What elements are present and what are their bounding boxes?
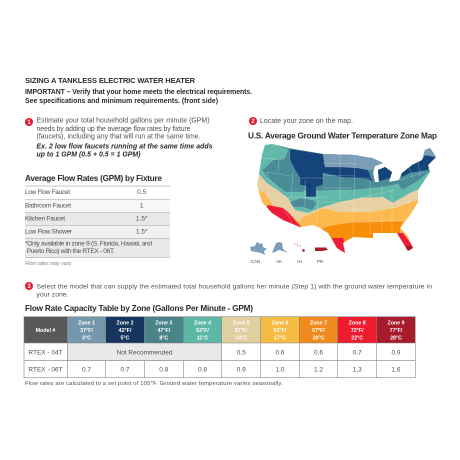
step 3 text: Select the model that can supply the estimated total household gallons her minute (Step 1) with the ground water temperature in	[36, 283, 432, 290]
table header: zone 6	[261, 317, 299, 343]
table header: zone 7	[299, 317, 338, 343]
row: RTEX-06T: 0.7	[120, 367, 130, 374]
step 1 text: Estimate your total household gallons per minute (GPM)	[36, 118, 210, 125]
table header: zone 1: 37°F/	[80, 328, 93, 334]
zone 2 michigan	[378, 167, 392, 181]
row: RTEX-04T	[28, 349, 401, 356]
zone 7 band	[322, 220, 404, 253]
inset label: PR: PR	[317, 259, 324, 264]
step 1 text: (faucets), including any that will run at the same time.	[36, 134, 201, 141]
flow rates table: Kitchen Faucet	[25, 216, 65, 222]
row: RTEX-04T: RTEX - 04T	[28, 349, 63, 356]
zone 1 plains	[323, 154, 383, 170]
zone 6 band	[258, 190, 418, 240]
flow rates heading: Average Flow Rates (GPM) by Fixture	[25, 174, 162, 183]
inset label: AK: AK	[276, 259, 282, 264]
zone 8 california	[266, 205, 301, 227]
inset label: CAN: CAN	[251, 259, 260, 264]
table header: zone 5: 14°C	[235, 336, 247, 342]
table header: zone 8: 22°C	[351, 336, 363, 342]
table header: zone 6: 17°C	[274, 336, 286, 342]
row: RTEX-06T: RTEX - 06T	[28, 367, 63, 374]
row: RTEX-06T: 0.8	[159, 367, 169, 374]
step 1 text	[36, 118, 210, 141]
inset icon: Canada	[250, 242, 267, 255]
flow rates table: Low Flow Faucet	[25, 189, 70, 196]
table header: zone 9	[377, 317, 415, 343]
table header: model	[24, 317, 67, 343]
step 3 text: your zone.	[36, 291, 69, 298]
map heading: U.S. Average Ground Water Temperature Zone Map	[248, 132, 437, 140]
step 1 example	[36, 144, 213, 158]
flow rates table: 1.5*	[136, 228, 148, 236]
important notice: See specifications and minimum requirements. (front side)	[25, 98, 218, 105]
row: RTEX-04T: 0.7	[353, 349, 362, 356]
flow rates table	[25, 186, 170, 258]
flow rates table: *Only available in zone 9 (S. Florida, Hawaii, and	[25, 240, 152, 248]
table header: zone 7: Zone 7	[310, 320, 327, 326]
inset icon: Alaska	[272, 242, 288, 253]
icon: step 1 badge: 1	[27, 120, 31, 126]
step 3	[25, 282, 432, 298]
table header: zone 3: Zone 3	[155, 320, 172, 326]
zone 3 band	[262, 144, 436, 192]
map: US ground water zones	[257, 144, 436, 253]
table header: zone 9: 28°C	[390, 336, 402, 342]
zone 3 pocket	[290, 198, 317, 210]
row: RTEX-06T: 0.8	[198, 367, 207, 374]
capacity table	[24, 317, 415, 378]
zone 9 tip	[406, 246, 413, 251]
important notice	[25, 89, 252, 105]
zone 8 florida	[397, 233, 413, 251]
table header: zone 8: 72°F/	[351, 328, 364, 334]
step 3 text	[36, 283, 432, 298]
table header: zone 1: Zone 1	[78, 320, 95, 326]
table header: zone 6: 62°F/	[274, 328, 287, 334]
row: RTEX-04T: 0.6	[275, 349, 285, 356]
table header: zone 6: Zone 6	[271, 320, 289, 326]
zone 4 band	[259, 144, 436, 214]
table header: zone 4: 52°F/	[196, 328, 209, 334]
row: RTEX-04T: 0.5	[237, 349, 246, 356]
flow rates table: 1	[140, 202, 144, 210]
table header: zone 2	[106, 317, 144, 343]
not recommended cell	[67, 343, 222, 361]
zone 2 northeast	[399, 155, 436, 177]
table header: zone 3: 8°C	[159, 336, 168, 342]
zone 1 maine	[422, 148, 436, 159]
table header: zone 9: 77°F/	[390, 328, 403, 334]
row: RTEX-06T: 1.3	[353, 367, 362, 374]
table header: zone 2: Zone 2	[116, 320, 134, 326]
step 1 example: up to 1 GPM (0.5 + 0.5 = 1 GPM)	[36, 151, 141, 158]
icon: step 3 badge: 3	[27, 284, 31, 290]
table header: zone 3: 47°F/	[157, 328, 171, 334]
not recommended cell: Not Recommended	[116, 349, 173, 356]
table header: zone 8	[338, 317, 377, 343]
table header: zone 4	[183, 317, 222, 343]
icon: step 3 badge	[25, 282, 33, 290]
table header: zone 8: Zone 8	[349, 320, 366, 326]
step 2	[249, 117, 353, 125]
row: RTEX-06T: 1.0	[275, 367, 285, 374]
flow rates table: Low Flow Shower	[25, 228, 73, 236]
important notice: IMPORTANT – Verify that your home meets the electrical requirements.	[25, 89, 252, 96]
table header: zone 7: 20°C	[313, 336, 325, 342]
zone 8 texas	[332, 238, 345, 253]
flow rates table: Bathroom Faucet	[25, 202, 71, 210]
table footnote: Flow rates are calculated to a set point of 105°F. Ground water temperature varies seasonally.	[25, 381, 283, 387]
row: RTEX-06T: 1.6	[391, 367, 401, 374]
capacity table heading: Flow Rate Capacity Table by Zone (Gallons Per Minute - GPM)	[25, 304, 253, 313]
table header: zone 1	[67, 317, 106, 343]
step 1 text: needs by adding up the average flow rates by fixture	[36, 126, 191, 133]
inset label: HI: HI	[297, 259, 302, 264]
icon: step 2 badge: 2	[251, 119, 255, 125]
row: RTEX-06T: 1.2	[314, 367, 323, 374]
flow rates note: Flow rates may vary.	[25, 261, 72, 267]
table header: zone 5: Zone 5	[233, 320, 250, 326]
table header: model: Model #	[36, 328, 55, 334]
table header: zone 2: 5°C	[121, 336, 130, 342]
row: RTEX-04T: 0.9	[391, 349, 401, 356]
row: RTEX-04T: 0.6	[314, 349, 323, 356]
table header: zone 3	[144, 317, 183, 343]
flow rates table: 1.5*	[136, 216, 148, 222]
step 2 text: Locate your zone on the map.	[260, 118, 353, 125]
flow rates table: 0.5	[137, 189, 147, 196]
table header: zone 9: Zone 9	[387, 320, 405, 326]
inset icon: Puerto Rico	[315, 248, 328, 251]
step 1 example: Ex. 2 low flow faucets running at the same time adds	[36, 144, 213, 151]
row: RTEX-06T: 0.7	[82, 367, 91, 374]
row: RTEX-06T: 0.9	[237, 367, 246, 374]
inset icon: Hawaii	[294, 244, 305, 252]
table header: zone 2: 42°F/	[119, 328, 132, 334]
icon: step 1 badge	[25, 118, 33, 126]
table header: zone 1: 3°C	[82, 336, 91, 342]
zone 2 mountain and plains	[290, 149, 373, 197]
table header: zone 7: 67°F/	[312, 328, 325, 334]
table header: zone 4: 11°C	[197, 336, 208, 342]
table header: zone 5: 57°F/	[235, 328, 248, 334]
title: SIZING A TANKLESS ELECTRIC WATER HEATER	[25, 76, 196, 85]
row: RTEX-06T	[28, 367, 401, 374]
step 1	[25, 118, 213, 158]
table header: zone 4: Zone 4	[194, 320, 211, 326]
flow rates table: Puerto Rico) with the RTEX - 06T.	[27, 248, 115, 255]
table header: zone 5	[222, 317, 261, 343]
